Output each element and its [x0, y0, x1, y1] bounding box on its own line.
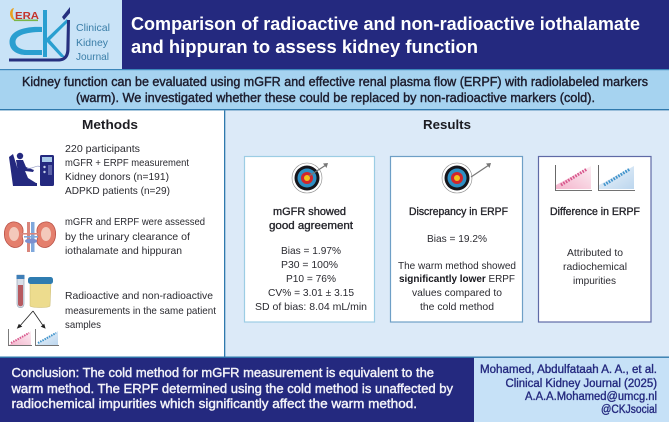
card: discrepancy in ERPF: Discrepancy in ERPF	[409, 206, 508, 218]
icon: kidneys	[4, 222, 56, 252]
card: difference in ERPF: Attributed to	[567, 247, 623, 259]
text: measurements: samples	[65, 319, 101, 331]
text: participants: Kidney donors (n=191)	[65, 171, 169, 183]
logo panel: Clinical Kidney Journal: ERA	[15, 10, 39, 22]
logo panel: Clinical Kidney Journal	[0, 0, 122, 69]
panel: methods	[0, 110, 224, 357]
intro band: (warm). We investigated whether these could be replaced by non-radioactive markers (cold).	[76, 91, 595, 105]
heading: methods: Methods	[82, 117, 138, 132]
panel: results	[224, 110, 669, 357]
icon: target with off-centre arrow	[442, 163, 491, 193]
title banner: Comparison of radioactive and non-radioactive iothalamate	[131, 14, 640, 34]
card: discrepancy in ERPF: The warm method showed	[398, 260, 516, 272]
icon: warm scatter chart	[556, 165, 592, 190]
icon: cold scatter chart	[598, 165, 635, 190]
card: mGFR agreement: good agreement	[269, 220, 353, 232]
icon: target with central arrow	[292, 163, 328, 193]
citation panel: A.A.A.Mohamed@umcg.nl	[525, 391, 657, 403]
text: measurements: Radioactive and non-radioactive	[65, 290, 213, 302]
conclusion panel	[0, 356, 669, 422]
text: participants: mGFR + ERPF measurement	[65, 157, 189, 169]
card: difference in ERPF: impurities	[573, 275, 616, 287]
card: mGFR agreement: P30 = 100%	[281, 259, 338, 271]
card: difference in ERPF: Difference in ERPF	[550, 206, 640, 218]
text: clearance: by the urinary clearance of	[65, 231, 190, 243]
text: clearance: mGFR and ERPF were assessed	[65, 216, 205, 228]
card: mGFR agreement: mGFR showed	[273, 206, 346, 218]
card: discrepancy in ERPF: the cold method	[420, 301, 494, 313]
title banner: and hippuran to assess kidney function	[131, 37, 478, 57]
icon: warm and cold scatter charts	[8, 329, 59, 346]
citation panel: Mohamed, Abdulfataah A. A., et al.	[480, 364, 657, 376]
card: discrepancy in ERPF: Bias = 19.2%	[427, 233, 487, 245]
card: mGFR agreement: Bias = 1.97%	[281, 245, 341, 257]
card: discrepancy in ERPF: values compared to	[412, 287, 502, 299]
conclusion panel: warm method. The ERPF determined using the cold method is unaffected by	[10, 382, 454, 396]
card: mGFR agreement	[244, 156, 374, 322]
citation panel: @CKJsocial	[601, 404, 657, 416]
text: participants	[65, 143, 189, 197]
title banner	[122, 0, 669, 69]
logo panel: Clinical Kidney Journal: Kidney	[76, 37, 109, 49]
text: measurements	[65, 290, 216, 331]
card: discrepancy in ERPF: significantly lower ERPF	[399, 273, 515, 285]
conclusion panel: Conclusion: The cold method for mGFR measurement is equivalent to the	[12, 366, 434, 380]
card: mGFR agreement: CV% = 3.01 ± 3.15	[268, 287, 354, 299]
card: discrepancy in ERPF	[390, 156, 522, 322]
text: clearance: iothalamate and hippuran	[65, 245, 182, 257]
citation panel: Clinical Kidney Journal (2025)	[506, 378, 657, 390]
text: clearance	[65, 216, 205, 257]
text: measurements: measurements in the same patient	[65, 305, 216, 317]
conclusion panel: radiochemical impurities which significantly affect the warm method.	[12, 397, 417, 411]
intro band: Kidney function can be evaluated using mGFR and effective renal plasma flow (ERPF) with radiolabeled markers	[22, 75, 648, 89]
icon: blood tube and urine cup	[16, 275, 53, 308]
text: participants: 220 participants	[65, 143, 140, 155]
text: participants: ADPKD patients (n=29)	[65, 185, 170, 197]
logo panel: Clinical Kidney Journal: Clinical	[76, 22, 110, 34]
intro band	[0, 69, 669, 110]
card: mGFR agreement: P10 = 76%	[286, 273, 336, 285]
card: difference in ERPF	[538, 156, 651, 322]
arrows to charts	[18, 311, 45, 328]
logo panel: Clinical Kidney Journal: Journal	[76, 51, 109, 63]
card: mGFR agreement: SD of bias: 8.04 mL/min	[255, 301, 367, 313]
icon: patient on dialysis machine	[9, 153, 54, 186]
heading: results: Results	[423, 117, 471, 132]
card: difference in ERPF: radiochemical	[563, 261, 627, 273]
citation panel	[474, 358, 669, 422]
